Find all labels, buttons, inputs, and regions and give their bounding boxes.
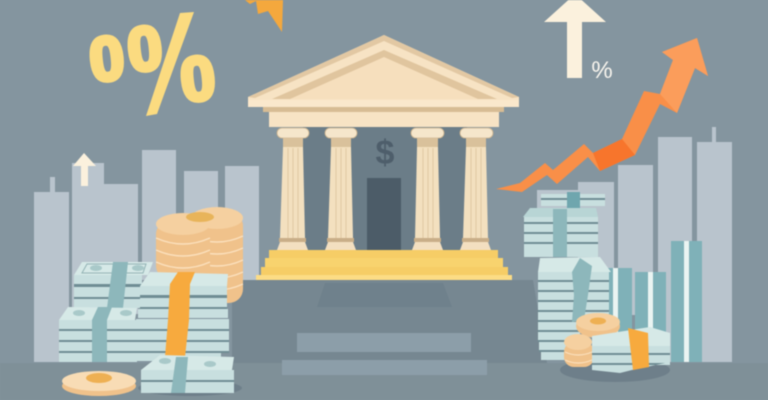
small white arrow (73, 153, 96, 186)
money stack right middle (523, 208, 598, 257)
money stack center left (136, 272, 229, 361)
lower step two (282, 360, 487, 375)
white up arrow with percent: % (591, 57, 613, 84)
percent symbol: 0 (124, 13, 166, 86)
flat coin (62, 371, 136, 396)
percent symbol (86, 12, 219, 116)
platform (232, 280, 547, 363)
rising orange arrow (496, 38, 708, 192)
right coins and stack (560, 313, 670, 382)
stair shadow (317, 283, 452, 307)
left skyline (34, 150, 259, 362)
bank wall (303, 127, 467, 250)
money stack lower left (59, 307, 137, 362)
money stack right tall (538, 257, 611, 360)
column one (277, 128, 309, 250)
right skyline (578, 127, 732, 362)
white up arrow with percent (544, 0, 613, 84)
column four (460, 128, 493, 250)
left coin stacks (156, 207, 243, 303)
percent symbol: 0 (177, 43, 219, 116)
money stack front (138, 355, 242, 396)
golden steps (256, 250, 512, 280)
door (367, 178, 401, 250)
column three (411, 128, 444, 250)
money stack back left (74, 262, 153, 308)
orange arrow fragment (245, 0, 283, 32)
pediment (248, 35, 519, 127)
money stack top right (537, 190, 605, 209)
teal bars (599, 241, 702, 362)
bank (248, 35, 519, 280)
dollar sign: $ (376, 134, 395, 172)
column two (325, 128, 357, 250)
ground (0, 363, 768, 400)
percent symbol: 0 (86, 23, 128, 96)
lower step one (297, 333, 471, 352)
